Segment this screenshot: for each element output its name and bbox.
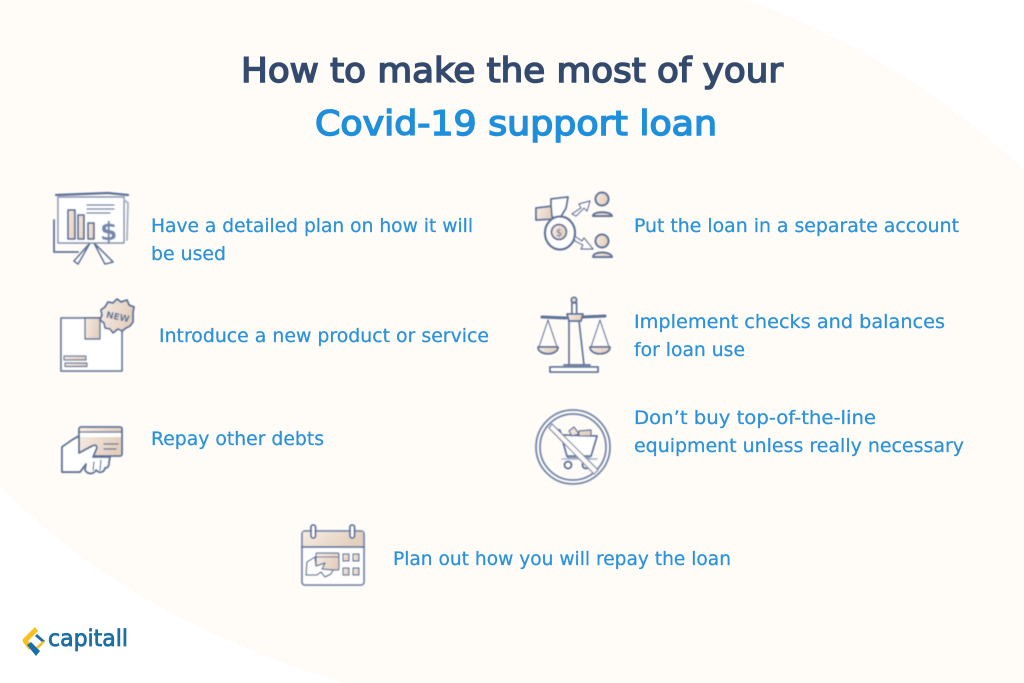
title: Covid-19 support loan	[315, 104, 717, 144]
icon: presentation board: $	[100, 217, 117, 246]
text: repay plan: Plan out how you will repay the loan	[393, 548, 731, 570]
logo: capitall	[23, 626, 128, 656]
text: detailed plan: be used	[151, 243, 226, 265]
icon: scales	[538, 297, 610, 372]
text: separate account: Put the loan in a separate account	[634, 215, 959, 237]
text: checks and balances: for loan use	[634, 339, 745, 361]
text: detailed plan	[151, 215, 473, 265]
text: top-of-the-line equipment	[634, 407, 964, 457]
text: new product: Introduce a new product or service	[159, 325, 489, 347]
icon: new product box: NEW	[105, 311, 130, 325]
icon: money bag to people	[536, 192, 612, 257]
text: repay debts: Repay other debts	[151, 428, 324, 450]
text: detailed plan: Have a detailed plan on how it will	[151, 215, 473, 237]
icon: no shopping cart	[536, 410, 610, 484]
text: checks and balances	[634, 311, 945, 361]
text: checks and balances: Implement checks and balances	[634, 311, 945, 333]
icon: hand with card	[62, 427, 122, 473]
icon: repayment calendar	[302, 525, 364, 585]
icon: new product box	[61, 299, 134, 371]
logo: capitall: capitall	[48, 626, 128, 652]
title: How to make the most of your	[241, 51, 783, 91]
text: top-of-the-line equipment: equipment unless really necessary	[634, 435, 964, 457]
icon: money bag to people: $	[556, 228, 562, 239]
title	[241, 51, 783, 144]
text: top-of-the-line equipment: Don’t buy top-of-the-line	[634, 407, 876, 429]
icon: presentation board	[54, 193, 128, 264]
